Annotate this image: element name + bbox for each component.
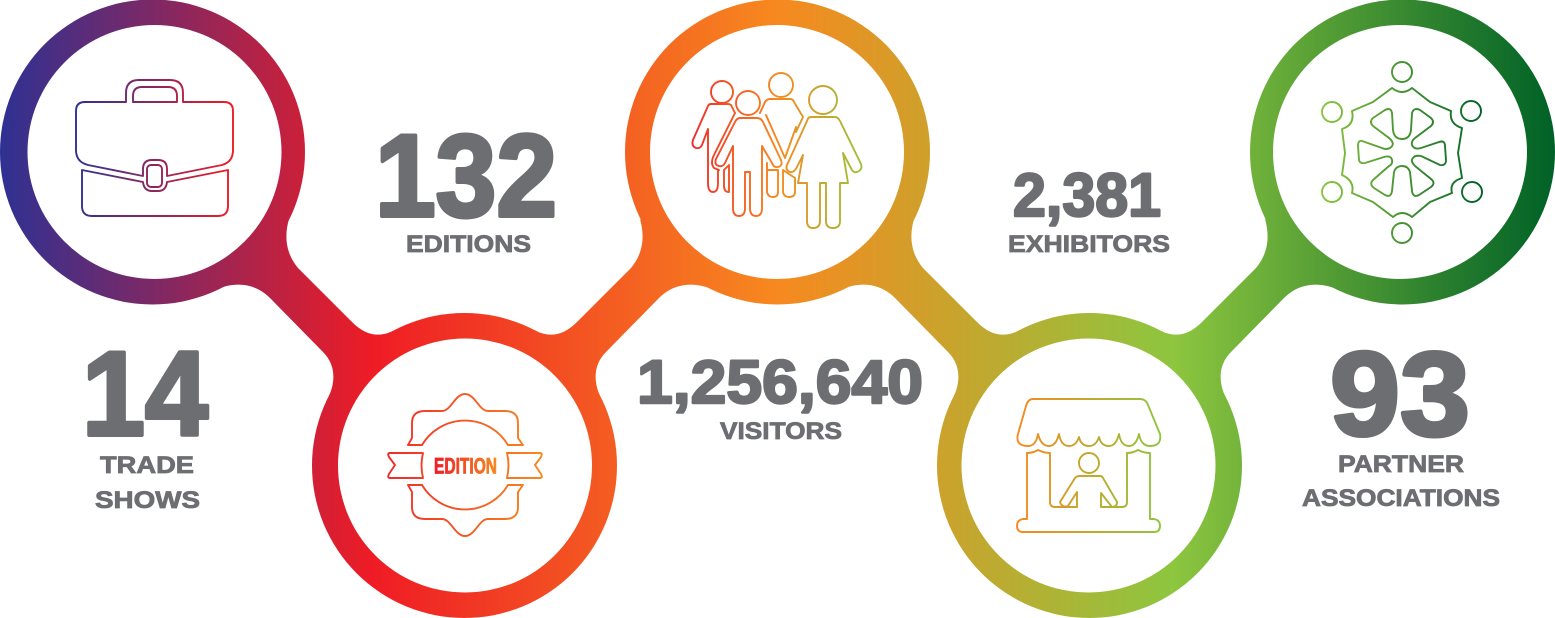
icon: partner associations	[1322, 62, 1482, 243]
stat: 1,256,640 visitors	[637, 348, 923, 445]
stat: 1,256,640 visitors: 1,256,640	[637, 348, 923, 416]
edition word: EDITION	[434, 454, 497, 478]
stat: 14 trade shows: 14	[82, 327, 208, 461]
icon: briefcase	[76, 80, 233, 216]
label: partner associations: PARTNER	[1338, 451, 1464, 478]
label: trade shows: SHOWS	[95, 487, 200, 514]
stat: 2,381 exhibitors	[1008, 161, 1170, 258]
icon: edition badge	[388, 394, 542, 536]
stat: 93 partner associations: 93	[1330, 328, 1470, 461]
label: editions: EDITIONS	[406, 231, 531, 258]
label: exhibitors: EXHIBITORS	[1008, 231, 1170, 258]
stat: 14 trade shows	[82, 327, 208, 514]
label: partner associations: ASSOCIATIONS	[1302, 485, 1500, 512]
icon: exhibition stand	[1017, 399, 1160, 532]
stat: 93 partner associations	[1302, 328, 1500, 512]
label: trade shows: TRADE	[100, 452, 194, 479]
label: visitors: VISITORS	[720, 418, 842, 445]
stat: 132 editions: 132	[375, 110, 557, 241]
stat: 2,381 exhibitors: 2,381	[1013, 161, 1161, 229]
icon: group of people	[692, 73, 862, 228]
label: partner associations	[1302, 451, 1500, 512]
label: trade shows	[95, 452, 200, 514]
